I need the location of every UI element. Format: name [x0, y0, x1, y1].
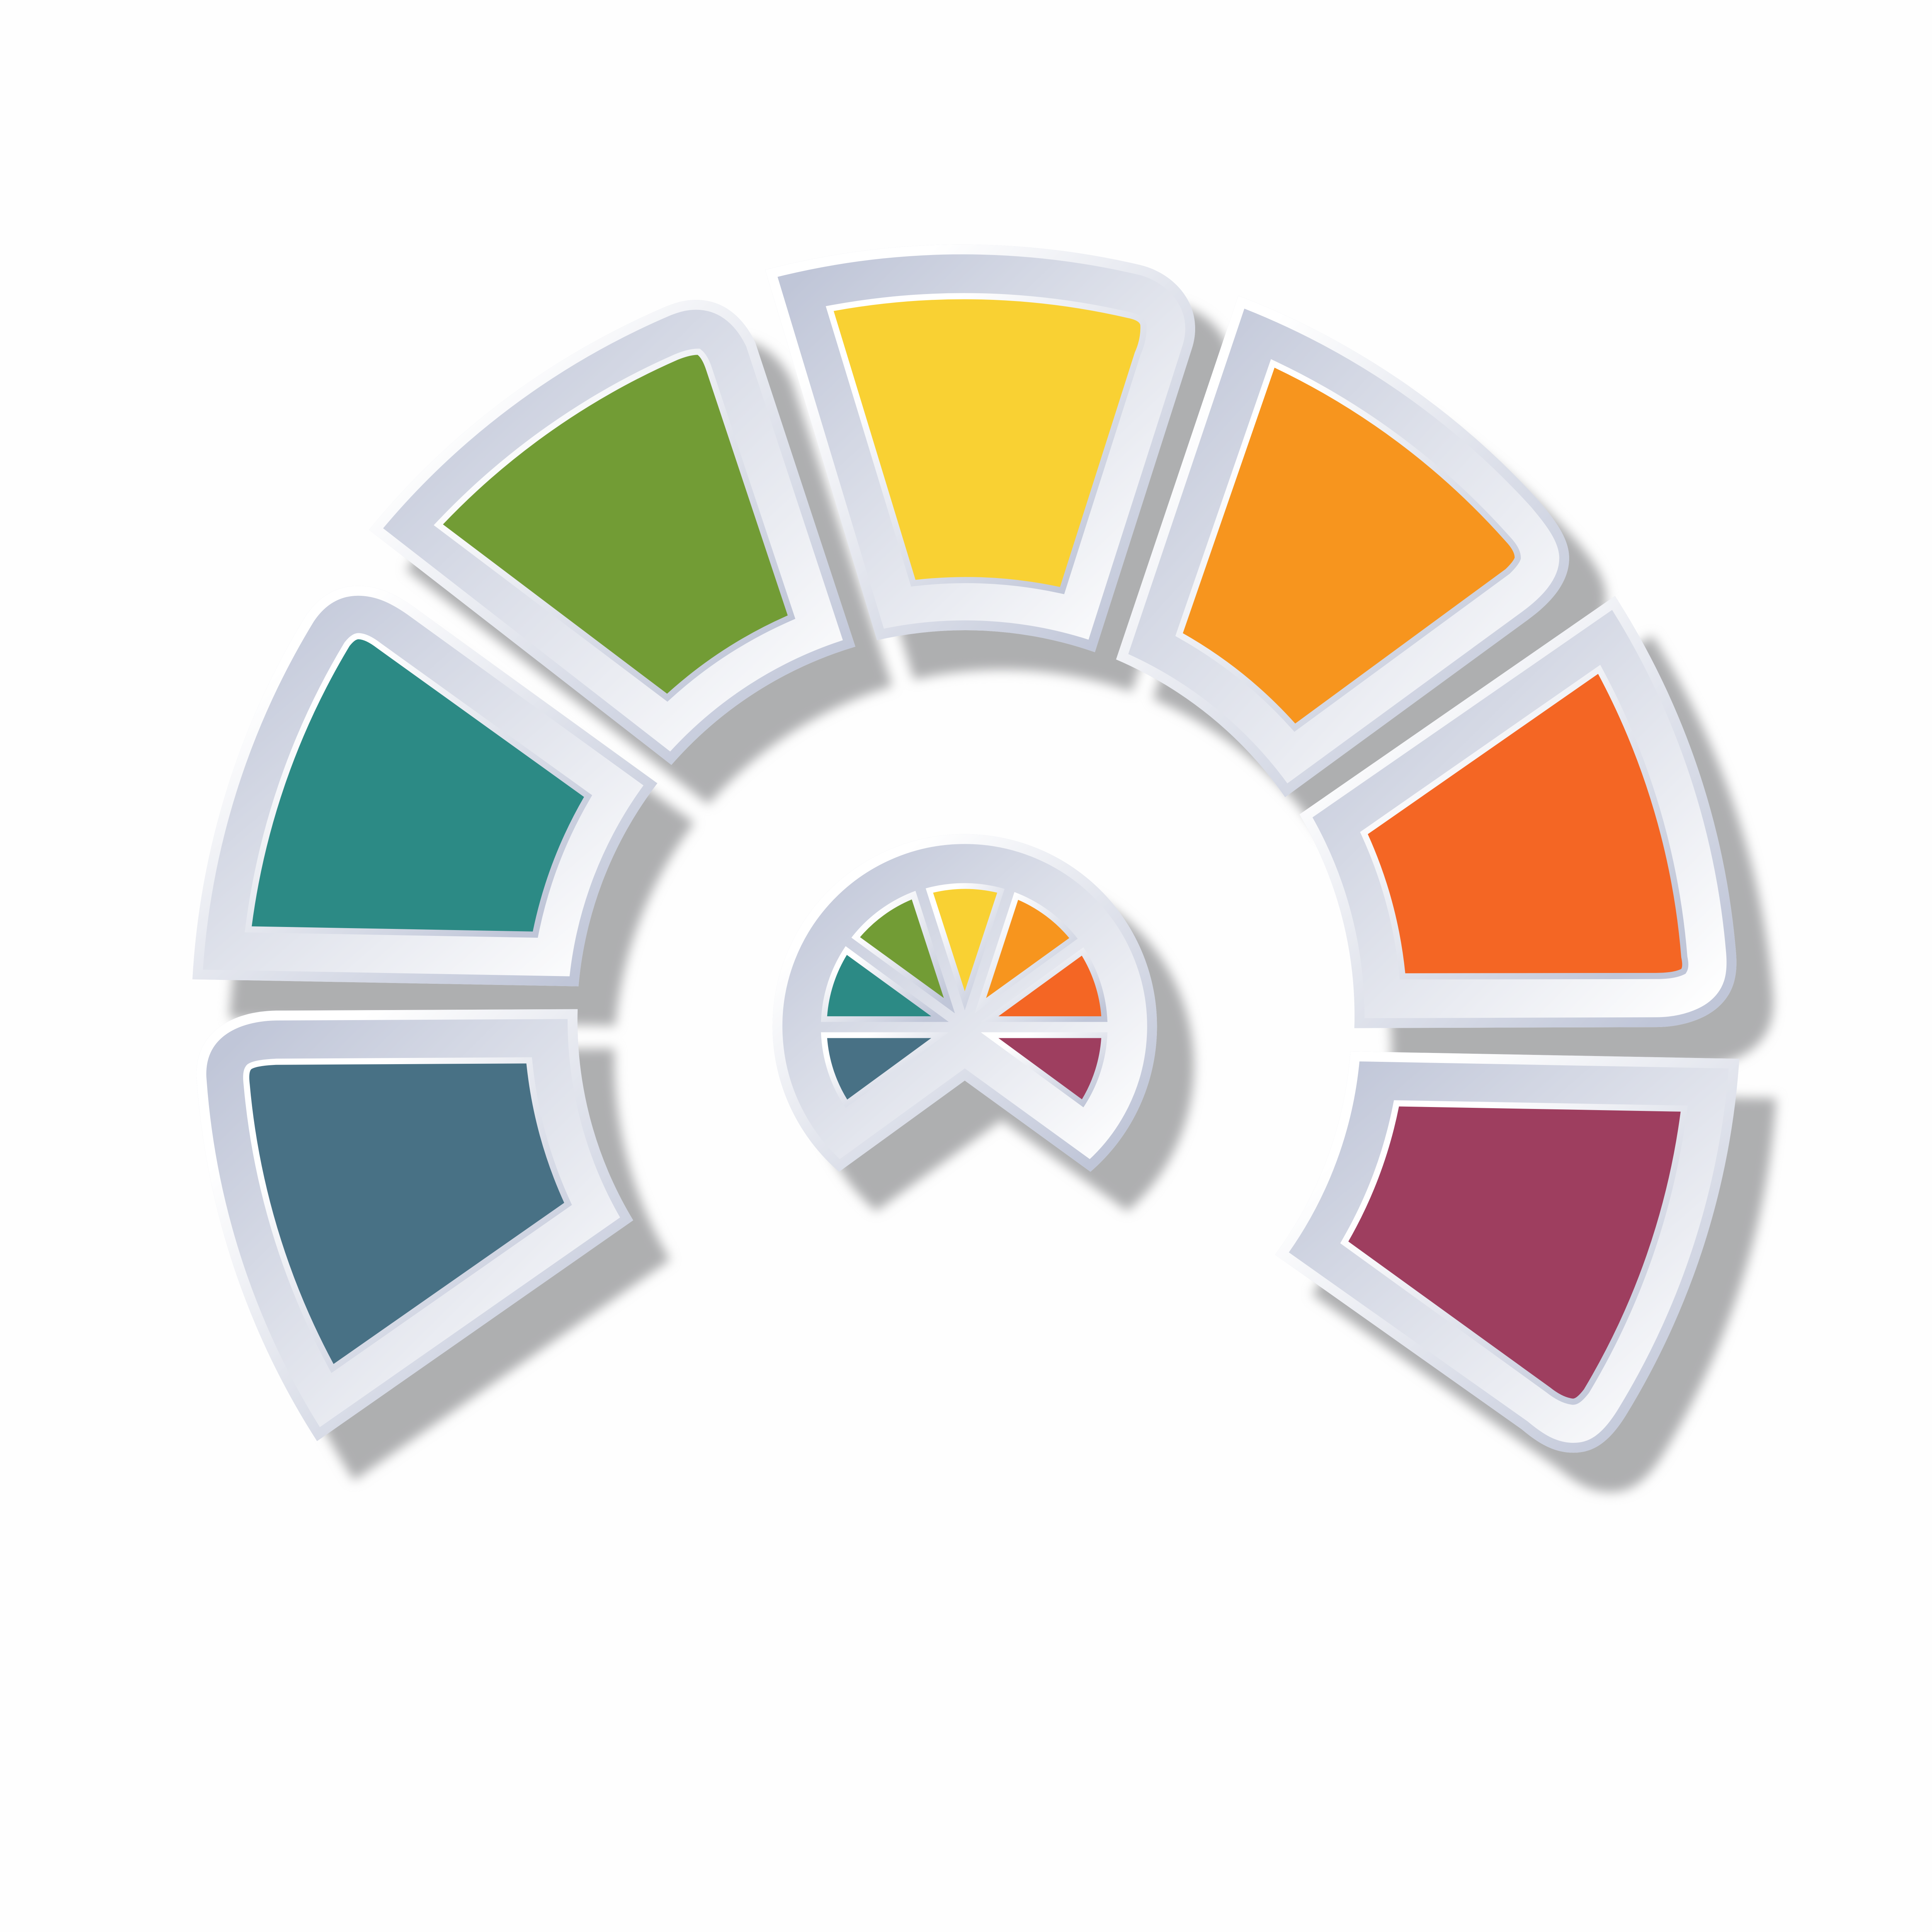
- panel: teal segment: [192, 586, 657, 986]
- hub wedge: orange: [975, 892, 1078, 1013]
- central hub mini chart: [772, 834, 1157, 1172]
- panel: slate blue segment: [196, 1009, 633, 1441]
- hub wedge: green: [851, 891, 955, 1013]
- drop shadows: [230, 284, 1776, 1492]
- panel: red-orange segment: [1299, 596, 1736, 1028]
- hub wedge: slate blue: [821, 1032, 949, 1108]
- hub wedge: maroon: [981, 1032, 1107, 1107]
- infographic: segmented arc with hub: [192, 244, 1782, 1498]
- hub wedge: yellow: [926, 883, 1005, 1010]
- hub wedge: red-orange: [981, 947, 1107, 1022]
- panel: yellow segment: [765, 245, 1195, 652]
- panel: green segment: [369, 300, 855, 765]
- panel: maroon segment: [1275, 1051, 1739, 1453]
- panel: orange segment: [1116, 296, 1569, 797]
- hub wedge: teal: [821, 946, 949, 1022]
